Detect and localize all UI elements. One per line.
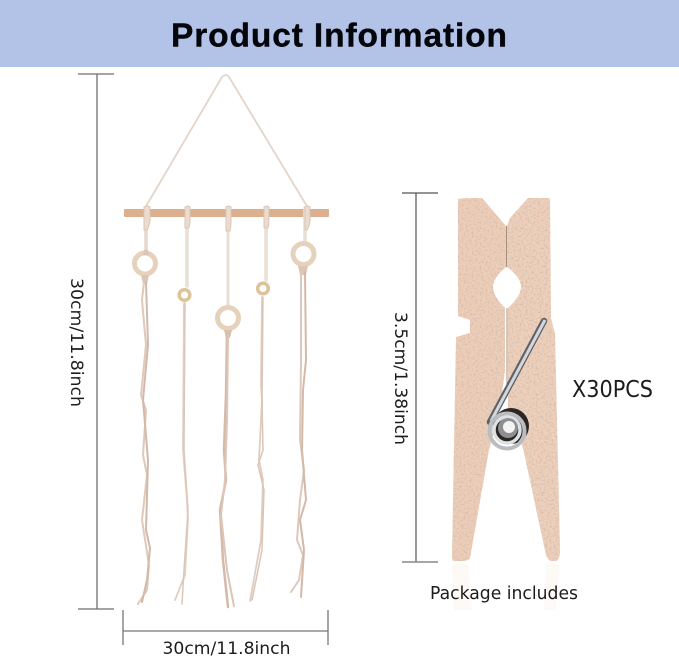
height dimension line: clothespin [402, 193, 438, 562]
wooden body [452, 198, 560, 561]
height dimension line: hanger [78, 74, 114, 609]
spring coil [490, 414, 524, 448]
cord 5 with large ring [291, 206, 314, 597]
width dimension line: hanger [123, 610, 328, 645]
height label: hanger: 30cm/11.8inch [66, 278, 86, 407]
right jaw [507, 198, 560, 561]
slit shadow [506, 226, 508, 385]
steel spring [490, 320, 545, 448]
cord 2 with small ring [175, 206, 190, 604]
hanging loop [145, 75, 308, 208]
package includes caption: Package includes [430, 584, 578, 604]
title: Product Information [171, 18, 507, 54]
cord 4 with small ring [250, 206, 269, 601]
spring wire arm [490, 321, 544, 422]
cord 1 with large ring [134, 206, 156, 604]
spring shadow [493, 408, 529, 444]
reflection [452, 564, 560, 610]
quantity label: X30PCS [572, 377, 653, 403]
macrame wall hanger [124, 75, 329, 607]
height label: clothespin: 3.5cm/1.38inch [390, 312, 410, 445]
cord 3 with large ring [218, 206, 238, 607]
clothespin [452, 198, 560, 610]
header band [0, 0, 679, 67]
left jaw [452, 198, 506, 561]
wooden rod [124, 209, 329, 217]
